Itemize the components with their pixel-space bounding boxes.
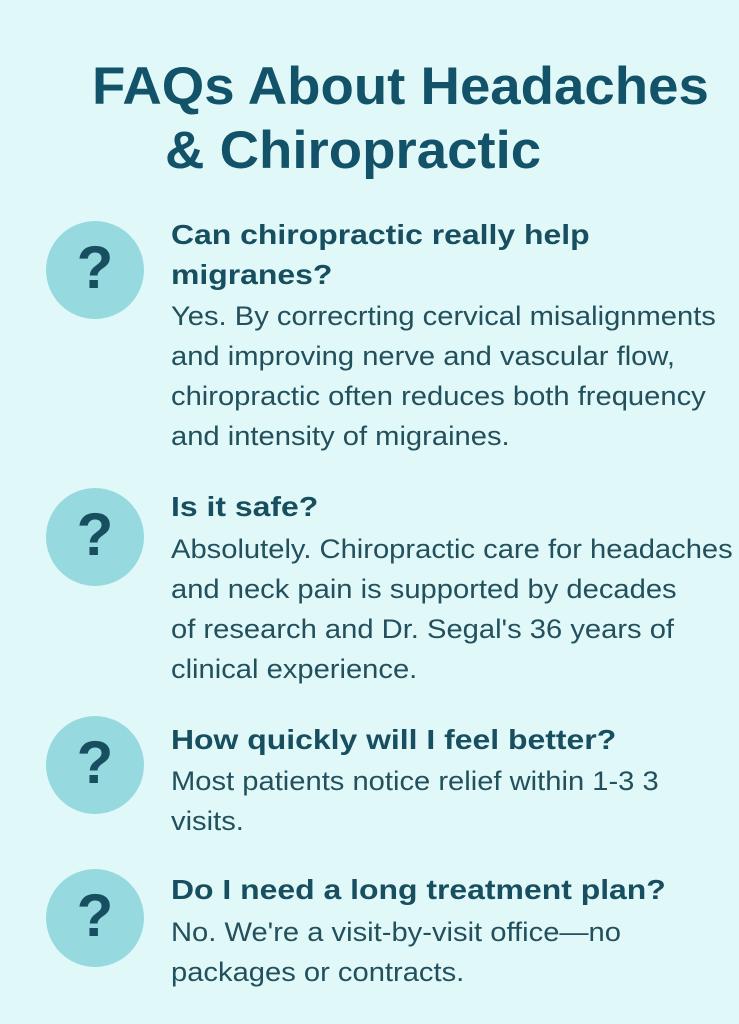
answer 2 [171,534,733,684]
question 2 heading: Is it safe? [171,491,318,522]
icon: question circle [46,716,144,814]
faq 2 [46,488,733,684]
icon: question circle [46,869,144,967]
icon: question circle [46,488,144,586]
faq 1 [46,219,716,451]
faq 3 [46,716,659,836]
answer 2: of research and Dr. Segal's 36 years of [171,614,674,644]
answer 4 [171,917,621,987]
answer 2: Absolutely. Chiropractic care for headaches [171,534,733,564]
title: & Chiropractic [165,121,541,180]
answer 1 [171,301,716,451]
question 3 heading: How quickly will I feel better? [171,724,616,755]
answer 3 [171,766,659,836]
answer 1: and intensity of migraines. [171,421,510,451]
answer 2: and neck pain is supported by decades [171,574,677,604]
question 1 heading [171,219,590,290]
title: FAQs About Headaches [92,57,709,116]
icon: question circle: ? [77,501,113,568]
question 1 heading: Can chiropractic really help [171,219,590,250]
answer 3: visits. [171,806,244,836]
answer 1: chiropractic often reduces both frequency [171,381,706,411]
faq 4 [46,869,666,987]
icon: question circle: ? [77,729,113,796]
answer 4: No. We're a visit-by-visit office—no [171,917,621,947]
title [92,57,709,180]
answer 2: clinical experience. [171,654,417,684]
answer 1: Yes. By correcrting cervical misalignments [171,301,716,331]
answer 4: packages or contracts. [171,957,464,987]
answer 1: and improving nerve and vascular flow, [171,341,675,371]
icon: question circle [46,221,144,319]
answer 3: Most patients notice relief within 1-3 3 [171,766,659,796]
icon: question circle: ? [77,234,113,301]
icon: question circle: ? [77,882,113,949]
question 4 heading: Do I need a long treatment plan? [171,874,666,905]
question 1 heading: migranes? [171,259,332,290]
